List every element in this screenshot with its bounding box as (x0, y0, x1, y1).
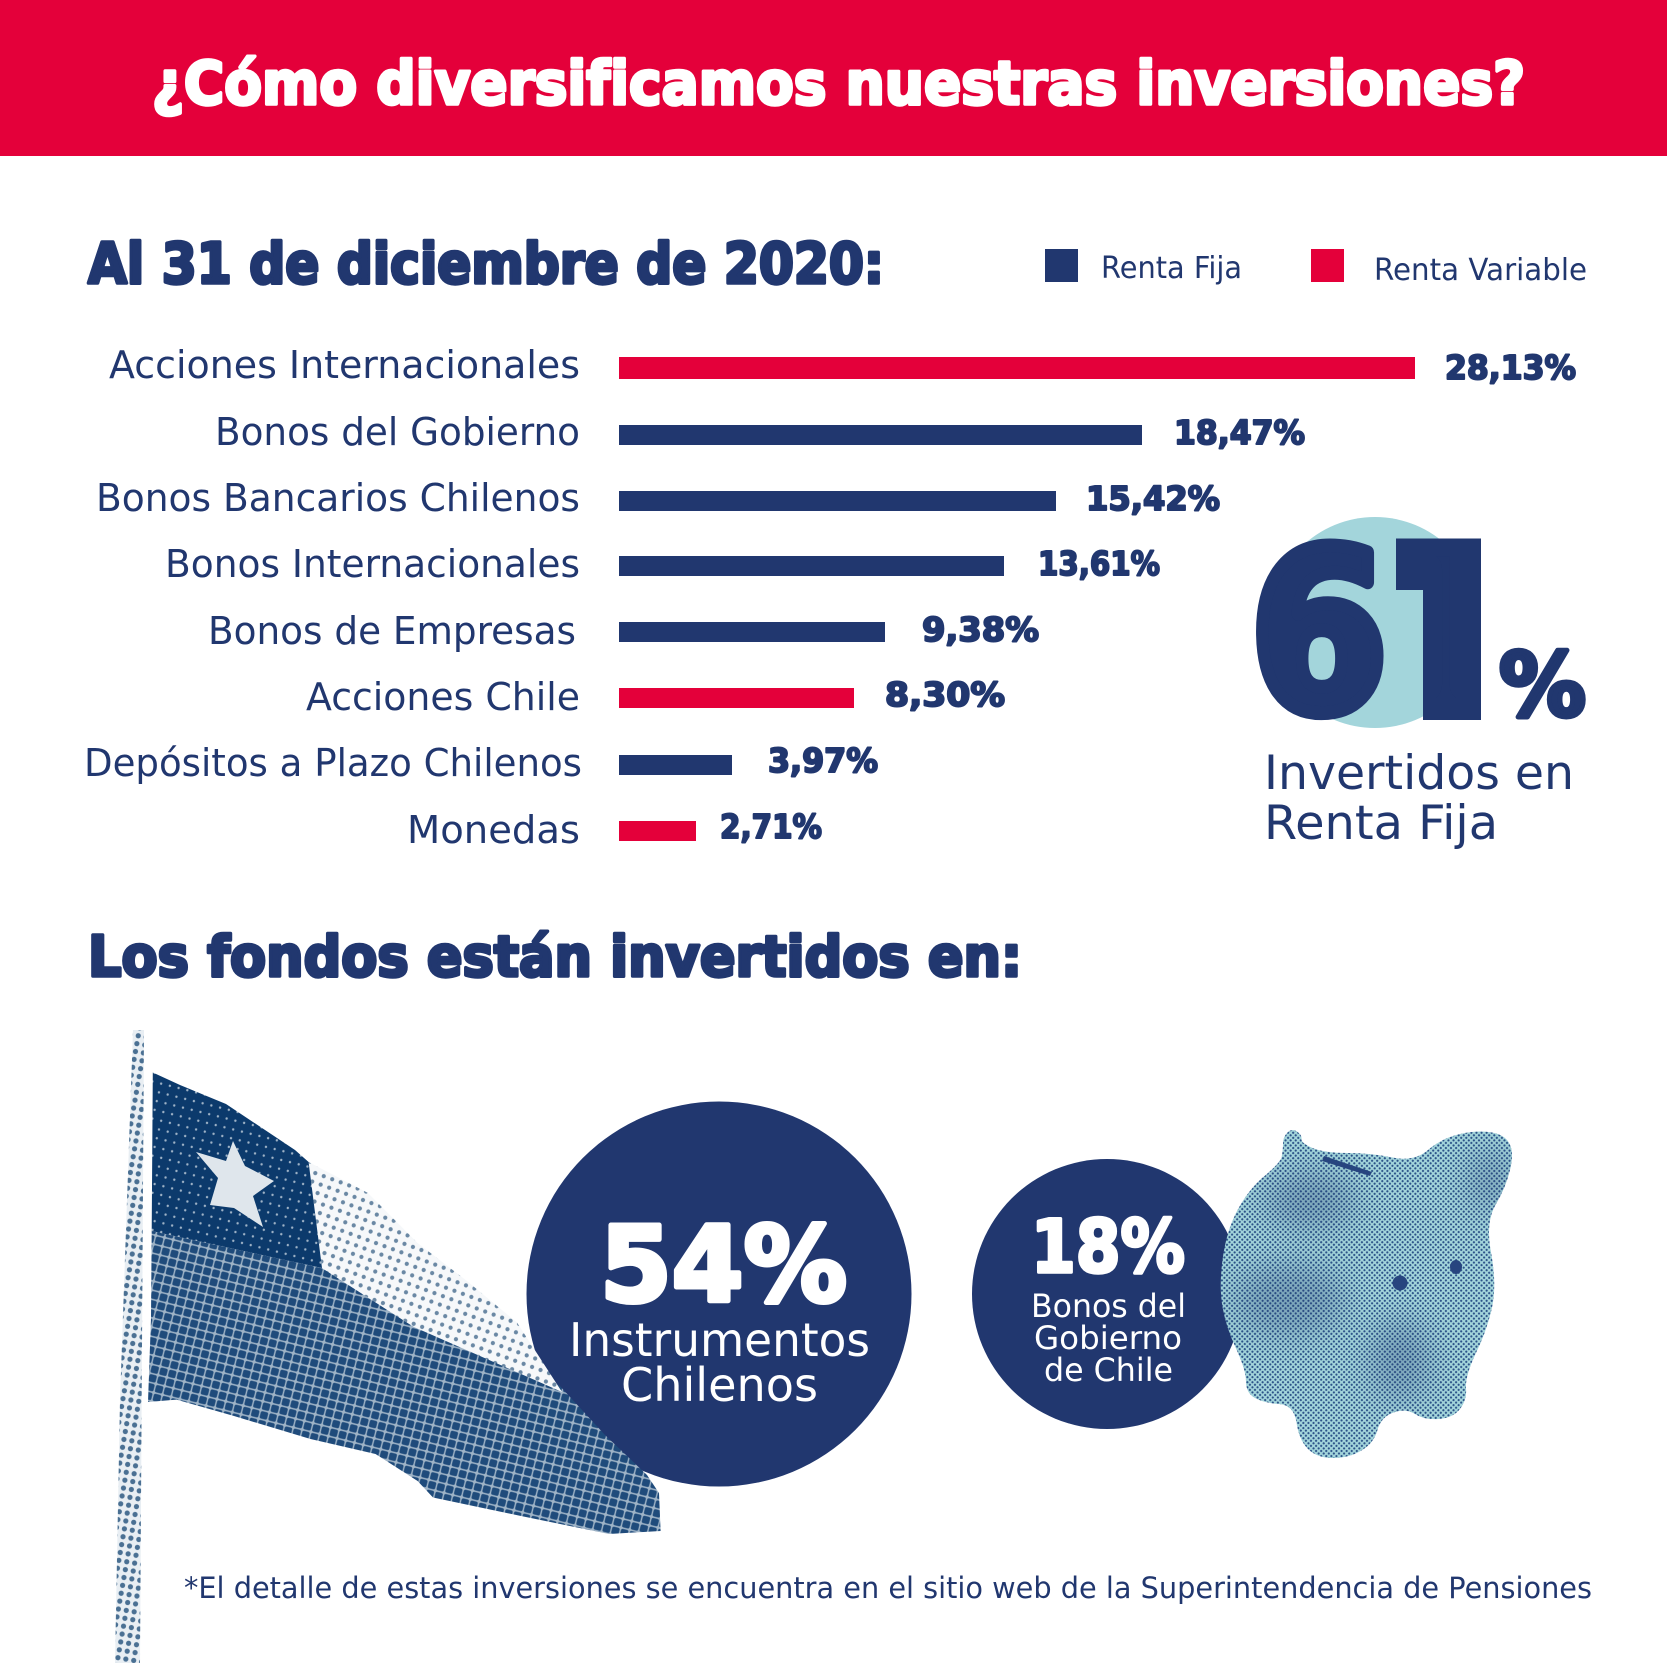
footnote: *El detalle de estas inversiones se encuentra en el sitio web de la Superintendencia de Pensiones (184, 1571, 1592, 1605)
circle: 18% bonos del gobierno: Gobierno (1034, 1319, 1182, 1357)
legend: renta fija: Renta Fija (1101, 251, 1242, 286)
callout: 61% renta fija: 6 (1250, 504, 1388, 763)
circle: 18% bonos del gobierno: Bonos del (1031, 1287, 1186, 1325)
legend: renta variable: Renta Variable (1374, 253, 1587, 288)
title: ¿Cómo diversificamos nuestras inversiones? (152, 49, 1525, 119)
legend (1045, 249, 1587, 288)
pig eyes (1392, 1276, 1408, 1290)
row: Bonos Bancarios Chilenos: Bonos Bancarios Chilenos (96, 476, 580, 520)
row: Bonos Internacionales (165, 542, 1160, 586)
circle: 18% bonos del gobierno (972, 1159, 1242, 1429)
row: Bonos del Gobierno (215, 410, 1305, 454)
row: Bonos de Empresas: Bonos de Empresas (208, 609, 576, 653)
circle: 54% instrumentos chilenos: Chilenos (621, 1358, 818, 1412)
callout: 61% renta fija (1250, 490, 1586, 851)
row: Acciones Chile: 8,30% (885, 675, 1005, 714)
row: Bonos Bancarios Chilenos (96, 476, 1220, 520)
flag blue canton (152, 1072, 322, 1268)
circle: 54% instrumentos chilenos: 54% (600, 1204, 847, 1326)
circle: 18% bonos del gobierno: de Chile (1044, 1351, 1173, 1389)
flag lower blue stripe (148, 1231, 661, 1534)
row: Bonos del Gobierno: 18,47% (1174, 413, 1305, 452)
callout: 61% renta fija: Renta Fija (1264, 796, 1498, 851)
heading: funds: Los fondos están invertidos en: (88, 925, 1022, 990)
row: Bonos de Empresas: 9,38% (922, 610, 1039, 649)
row: Bonos de Empresas (208, 609, 1039, 653)
legend: renta fija (1045, 249, 1242, 286)
callout: 61% renta fija: Invertidos en (1264, 746, 1574, 801)
header banner (0, 0, 1667, 156)
row: Depósitos a Plazo Chilenos: 3,97% (768, 741, 878, 780)
row: Depósitos a Plazo Chilenos (84, 741, 878, 785)
row: Bonos Bancarios Chilenos: 15,42% (1086, 479, 1220, 518)
row: Acciones Chile (306, 675, 1005, 719)
row: Acciones Internacionales: Acciones Internacionales (109, 343, 580, 387)
icon: piggy bank (1220, 1130, 1512, 1458)
callout: 61% renta fija: 1 (1355, 490, 1525, 774)
circle: 54% instrumentos chilenos: Instrumentos (569, 1313, 870, 1367)
circle: 54% instrumentos chilenos (526, 1102, 912, 1486)
icon: chilean flag (115, 1030, 661, 1663)
row: Monedas (407, 807, 822, 852)
flag white stripe (309, 1162, 562, 1392)
bar chart (84, 343, 1576, 852)
pig shading (1235, 1150, 1510, 1400)
row: Bonos del Gobierno: Bonos del Gobierno (215, 410, 580, 454)
row: Bonos Internacionales: 13,61% (1038, 544, 1160, 583)
row: Monedas: Monedas (407, 808, 580, 852)
legend: renta variable (1311, 249, 1587, 288)
pig coin slot (1322, 1156, 1372, 1176)
row: Bonos Internacionales: Bonos Internacionales (165, 542, 580, 586)
heading: date: Al 31 de diciembre de 2020: (88, 232, 884, 297)
row: Acciones Internacionales: 28,13% (1445, 348, 1576, 387)
flag star (196, 1141, 274, 1227)
row: Depósitos a Plazo Chilenos: Depósitos a Plazo Chilenos (84, 741, 582, 785)
row: Monedas: 2,71% (720, 807, 822, 846)
callout: 61% renta fija: % (1499, 634, 1586, 737)
row: Acciones Chile: Acciones Chile (306, 675, 580, 719)
row: Acciones Internacionales (109, 343, 1576, 387)
circle: 18% bonos del gobierno: 18% (1031, 1205, 1185, 1290)
flag pole (115, 1030, 144, 1663)
